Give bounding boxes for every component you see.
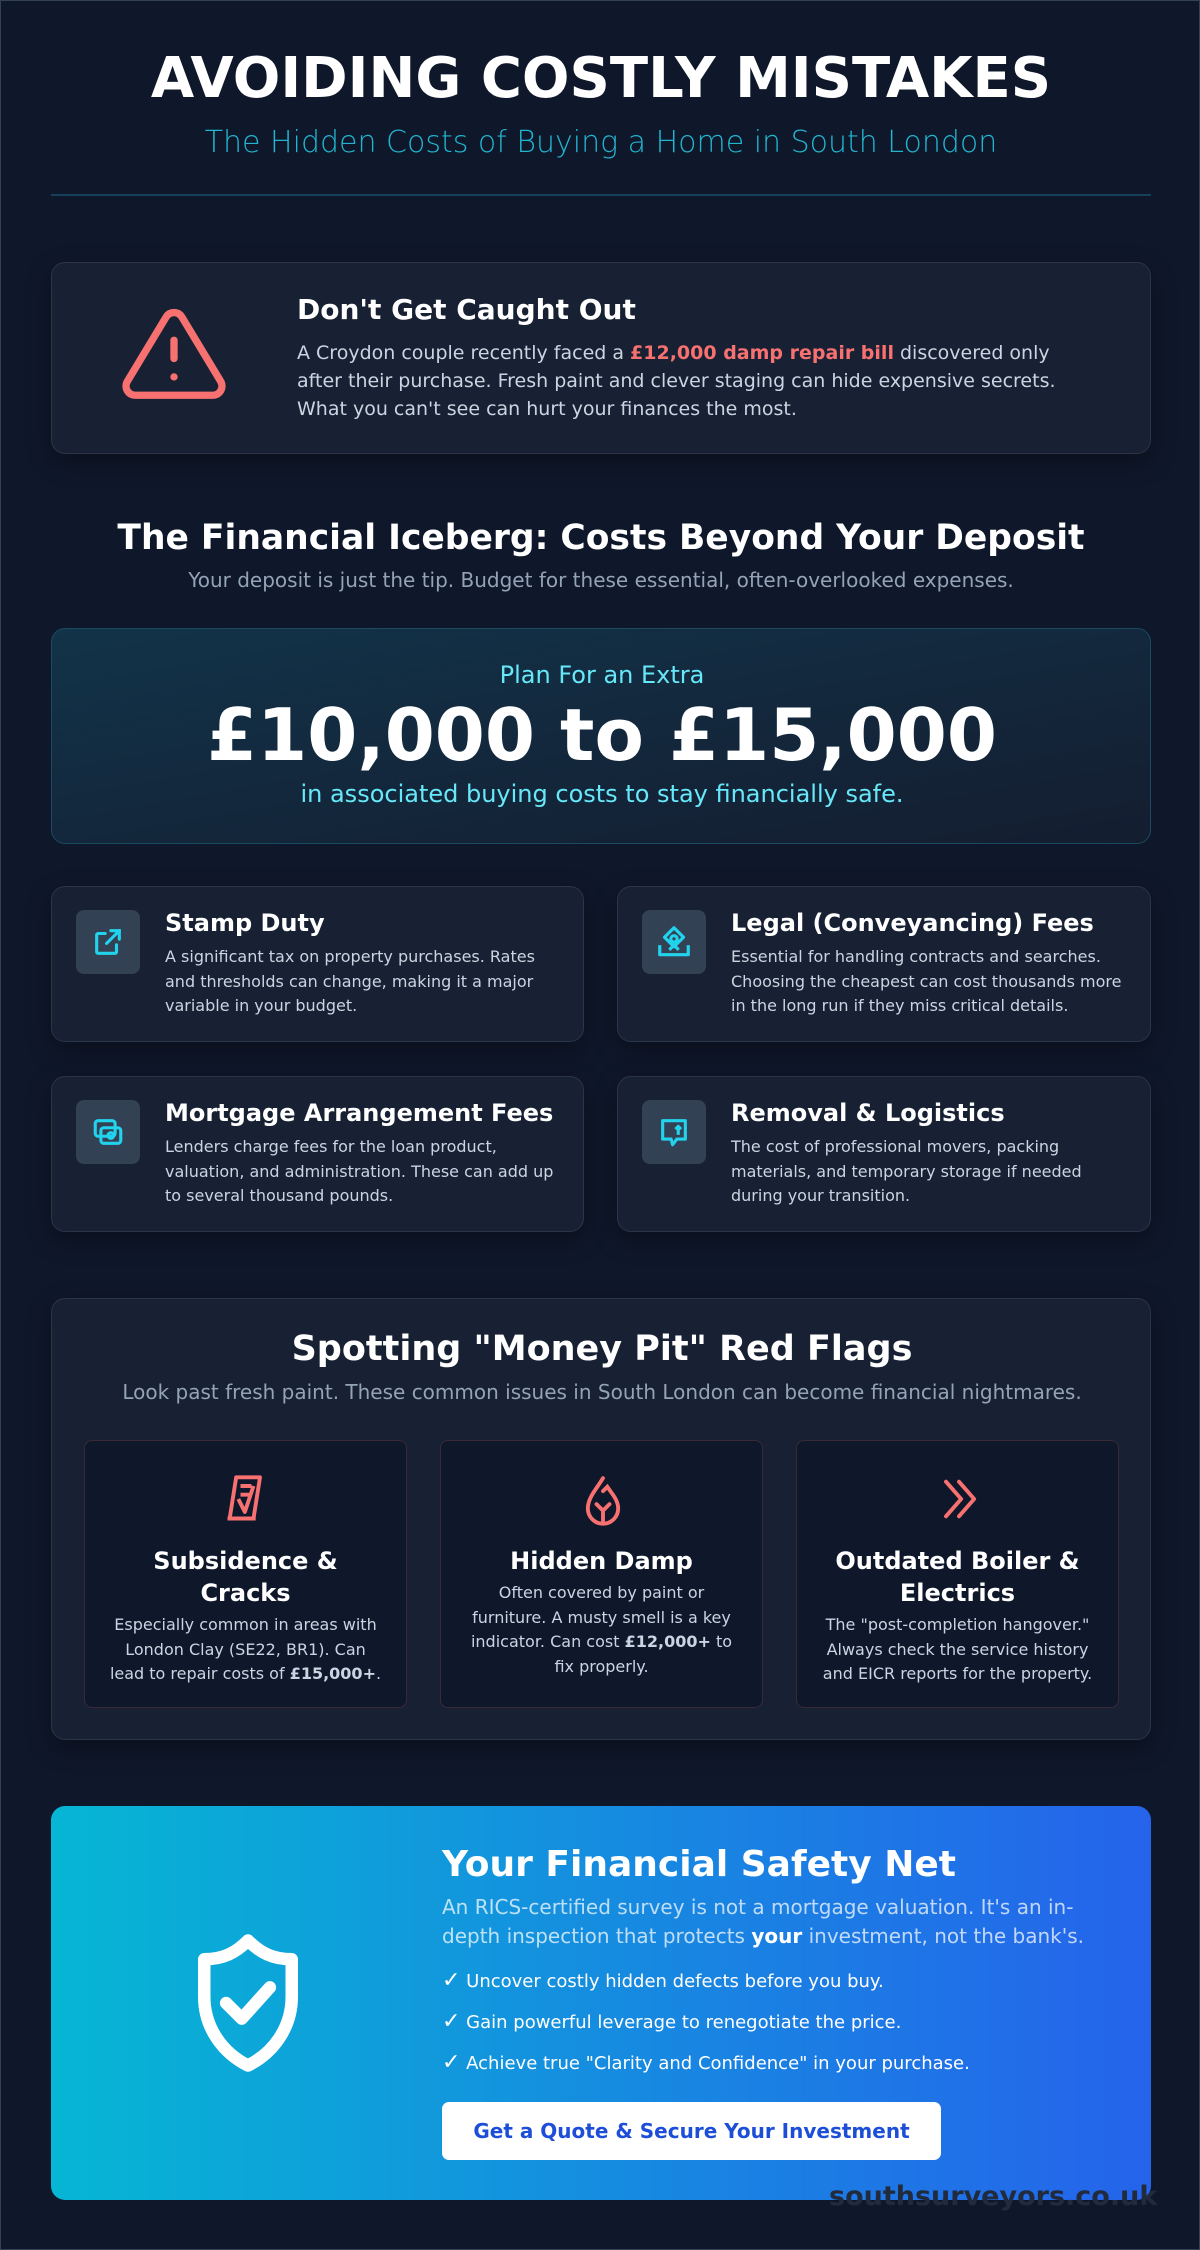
heading: Don't Get Caught Out (297, 293, 636, 326)
card: mortgage fees: Lenders charge fees for the loan product, valuation, and administration. These can add up to several thousand pounds. (165, 1137, 553, 1205)
icon: chevrons (944, 1480, 976, 1518)
card: damp: Hidden Damp (510, 1547, 693, 1575)
card: stamp duty: Stamp Duty (165, 909, 325, 937)
icon: warning triangle (122, 308, 226, 399)
panel: red flags: Look past fresh paint. These common issues in South London can become financial nightmares. (122, 1380, 1082, 1404)
icon: shield (198, 1934, 298, 2072)
card: boiler: Electrics (900, 1579, 1015, 1607)
card: stamp duty (51, 886, 584, 1042)
card: subsidence (84, 1440, 407, 1708)
text: An RICS-certified survey is not a mortgage valuation. It's an in-depth inspection that protects your investment, not the bank's. (442, 1895, 1084, 1948)
highlight box: in associated buying costs to stay financially safe. (300, 780, 904, 808)
icon: drop (586, 1476, 620, 1526)
bullet list: ✓ Achieve true "Clarity and Confidence" in your purchase. (442, 2050, 970, 2075)
card: legal fees: Legal (Conveyancing) Fees (731, 909, 1094, 937)
card: subsidence: Cracks (200, 1579, 291, 1607)
text: A Croydon couple recently faced a £12,000 damp repair bill discovered only after their purchase. Fresh paint and clever staging can hide expensive secrets. What you can't see can hurt your finances the most. (297, 342, 1056, 420)
icon: moving (642, 1100, 706, 1164)
panel: CTA safety net (51, 1806, 1151, 2200)
watermark: southsurveyors.co.uk (829, 2181, 1157, 2212)
icon: money (76, 1100, 140, 1164)
card: boiler: Outdated Boiler & (835, 1547, 1080, 1575)
subtitle: The Hidden Costs of Buying a Home in South London (205, 125, 997, 160)
card: removals: The cost of professional movers, packing materials, and temporary storage if needed during your transition. (731, 1137, 1082, 1205)
heading: Your Financial Safety Net (442, 1844, 956, 1885)
card: subsidence: Especially common in areas with London Clay (SE22, BR1). Can lead to repair costs of £15,000+. (110, 1615, 381, 1683)
icon: external link (76, 910, 140, 974)
card: damp (440, 1440, 763, 1708)
card: removals: Removal & Logistics (731, 1099, 1005, 1127)
card: legal fees: Essential for handling contracts and searches. Choosing the cheapest can cost thousands more in the long run if they miss critical details. (731, 947, 1121, 1015)
title: AVOIDING COSTLY MISTAKES (151, 46, 1051, 111)
panel: warning (51, 262, 1151, 454)
panel: red flags (51, 1298, 1151, 1740)
icon: house (642, 910, 706, 974)
heading: Spotting "Money Pit" Red Flags (292, 1329, 912, 1369)
card: mortgage fees (51, 1076, 584, 1232)
button (442, 2102, 941, 2160)
card: boiler: The "post-completion hangover." Always check the service history and EICR reports for the property. (823, 1615, 1092, 1683)
highlight box (51, 628, 1151, 844)
card: subsidence: Subsidence & (153, 1547, 338, 1575)
section heading: iceberg: The Financial Iceberg: Costs Beyond Your Deposit (117, 518, 1085, 558)
section subtitle: Your deposit is just the tip. Budget for these essential, often-overlooked expenses. (188, 568, 1014, 592)
card: mortgage fees: Mortgage Arrangement Fees (165, 1099, 553, 1127)
bullet list: ✓ Gain powerful leverage to renegotiate the price. (442, 2009, 901, 2034)
bullet list: ✓ Uncover costly hidden defects before you buy. (442, 1968, 884, 1993)
card: stamp duty: A significant tax on property purchases. Rates and thresholds can change, making it a major variable in your budget. (165, 947, 535, 1015)
button: Get a Quote & Secure Your Investment (473, 2119, 910, 2143)
big number: £10,000 to £15,000 (207, 693, 997, 777)
bullet list (442, 1968, 970, 2075)
icon: cracked wall (228, 1475, 262, 1520)
highlight box: Plan For an Extra (500, 661, 704, 689)
card: damp: Often covered by paint or furniture. A musty smell is a key indicator. Can cost £12,000+ to fix properly. (471, 1583, 732, 1676)
card: boiler (796, 1440, 1119, 1708)
card: removals (617, 1076, 1151, 1232)
card: legal fees (617, 886, 1151, 1042)
